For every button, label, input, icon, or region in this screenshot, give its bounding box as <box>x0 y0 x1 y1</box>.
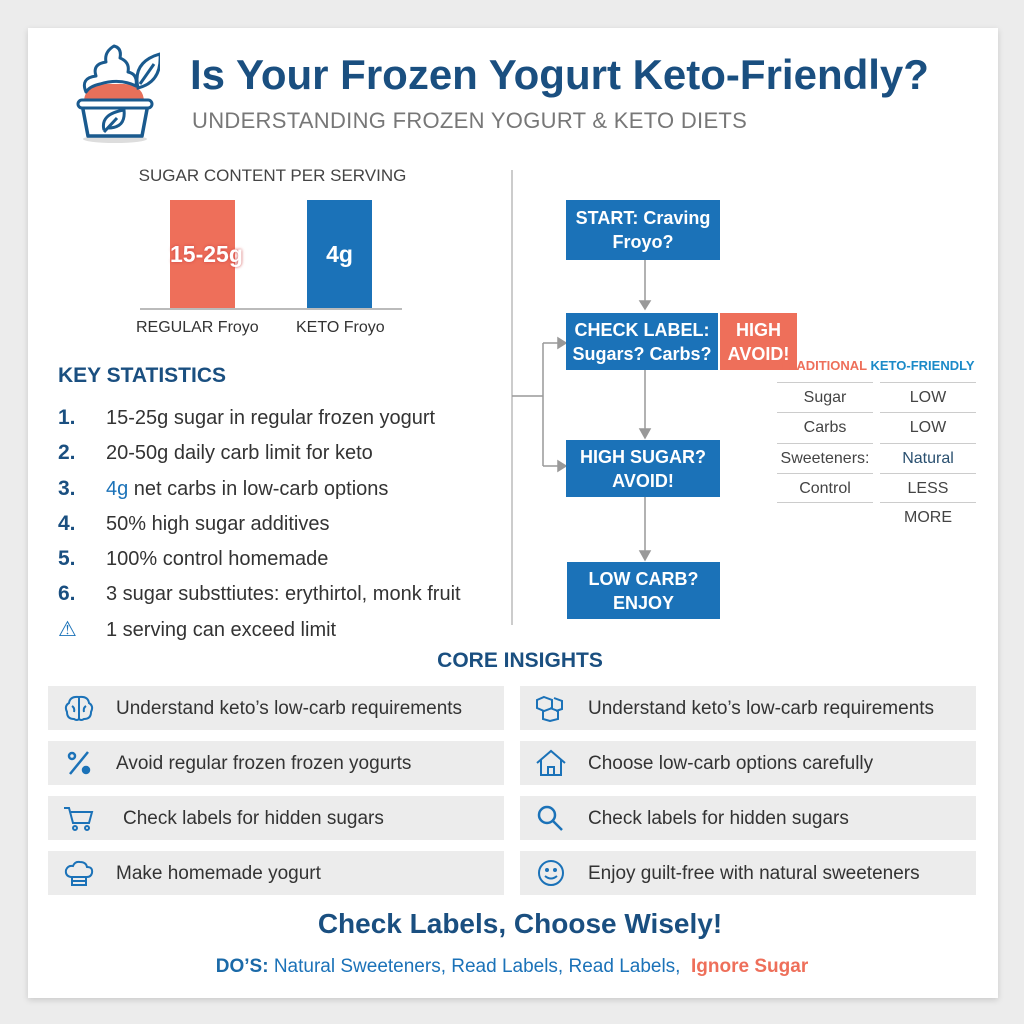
flowchart: Sugars? Carbs? <box>572 344 712 364</box>
insights grid: Check labels for hidden sugars <box>123 808 384 829</box>
icon: frozen yogurt cup <box>76 44 160 143</box>
statistics list: 2. <box>58 441 76 464</box>
insights grid: Understand keto’s low-carb requirements <box>588 698 934 719</box>
comparison table: MORE <box>904 509 952 526</box>
insights grid: Make homemade yogurt <box>116 863 321 884</box>
statistics list: 5. <box>58 547 76 570</box>
flowchart: CHECK LABEL: <box>574 320 709 340</box>
comparison table: LESS <box>908 480 948 497</box>
statistics list: 50% high sugar additives <box>106 513 329 535</box>
statistics list: 3. <box>58 477 76 500</box>
comparison table: Sweeteners: <box>781 450 869 467</box>
dos line: DO’S: Natural Sweeteners, Read Labels, Read Labels, Ignore Sugar <box>216 956 808 977</box>
bar chart: 15-25g <box>170 241 243 267</box>
insights grid: Choose low-carb options carefully <box>588 753 873 774</box>
comparison table: Carbs <box>804 419 846 436</box>
statistics list: 1. <box>58 406 76 429</box>
statistics list: 100% control homemade <box>106 548 328 570</box>
flowchart: HIGH SUGAR? <box>580 446 706 466</box>
flowchart <box>512 200 797 619</box>
title: Is Your Frozen Yogurt Keto-Friendly? <box>190 51 929 98</box>
flowchart: START: Craving <box>576 208 710 228</box>
statistics list: ⚠ <box>58 618 77 641</box>
key statistics heading: KEY STATISTICS <box>58 364 226 387</box>
closing headline: Check Labels, Choose Wisely! <box>318 908 722 939</box>
flowchart: AVOID! <box>612 470 674 490</box>
statistics list: 4g net carbs in low-carb options <box>106 478 388 500</box>
statistics list: 4. <box>58 512 76 535</box>
flowchart: AVOID! <box>728 344 789 364</box>
insights grid: Enjoy guilt-free with natural sweeteners <box>588 863 920 884</box>
bar chart: 4g <box>326 241 353 267</box>
flowchart: Froyo? <box>612 232 674 252</box>
statistics list: 3 sugar substtiutes: erythirtol, monk fruit <box>106 583 461 605</box>
comparison table: LOW <box>910 419 946 436</box>
comparison table: Natural <box>902 450 954 467</box>
statistics list <box>58 406 461 641</box>
insights grid <box>48 686 976 895</box>
statistics list: 20-50g daily carb limit for keto <box>106 442 373 464</box>
bar chart <box>136 166 406 336</box>
flowchart: LOW CARB? <box>588 568 698 588</box>
flowchart: ENJOY <box>613 592 674 612</box>
bar chart: KETO Froyo <box>296 319 385 336</box>
statistics list: 15-25g sugar in regular frozen yogurt <box>106 407 435 429</box>
core insights heading: CORE INSIGHTS <box>437 649 603 672</box>
comparison table: TRADITIONAL KETO-FRIENDLY <box>779 358 975 373</box>
comparison table: Control <box>799 480 851 497</box>
comparison table: LOW <box>910 389 946 406</box>
bar chart: REGULAR Froyo <box>136 319 259 336</box>
insights grid: Check labels for hidden sugars <box>588 808 849 829</box>
statistics list: 6. <box>58 582 76 605</box>
insights grid: Avoid regular frozen frozen yogurts <box>116 753 411 774</box>
comparison table: Sugar <box>804 389 846 406</box>
statistics list: 1 serving can exceed limit <box>106 619 336 641</box>
bar chart: SUGAR CONTENT PER SERVING <box>139 166 406 185</box>
flowchart: HIGH <box>736 320 781 340</box>
insights grid: Understand keto’s low-carb requirements <box>116 698 462 719</box>
comparison table <box>777 358 976 526</box>
subtitle: UNDERSTANDING FROZEN YOGURT & KETO DIETS <box>192 108 747 133</box>
